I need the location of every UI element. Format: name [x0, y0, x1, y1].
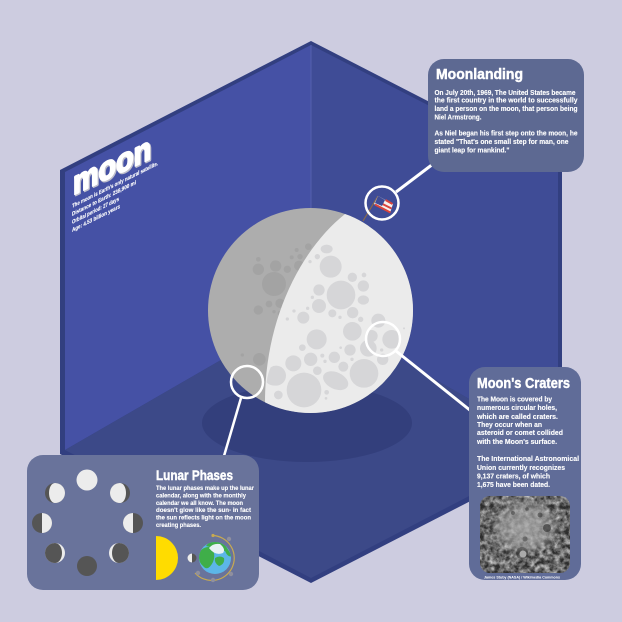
moonlanding text [434, 88, 578, 154]
craters text: The Moon is covered by [477, 394, 552, 404]
moon facts on wall: The moon is Earth's only natural satellite. [72, 160, 158, 210]
lunar phases text: calendar we all know. The moon [156, 500, 243, 507]
isometric room [60, 41, 562, 583]
moonlanding text: the first country in the world to successfully [434, 96, 578, 104]
lunar phases text: creating phases. [156, 522, 201, 529]
moon facts on wall: Distance to Earth: 238,900 mi [72, 179, 136, 218]
crater photo [480, 496, 570, 573]
dark side craters [241, 243, 312, 366]
moon dark side [208, 208, 413, 413]
lunar phases heading: Lunar Phases [156, 467, 233, 483]
full moon [76, 470, 98, 490]
panel: moon's craters [469, 367, 581, 580]
phases callout [224, 366, 263, 456]
craters text [476, 394, 579, 489]
right wall [311, 45, 558, 450]
lunar phases text: doesn't glow like the sun- in fact [156, 507, 252, 514]
craters text: numerous circular holes, [477, 403, 557, 412]
moon title on wall: moon [74, 131, 152, 204]
flag on moon [363, 196, 393, 221]
moon title on wall: moon [73, 130, 151, 203]
waning gibbous [110, 483, 130, 503]
moon [208, 200, 420, 420]
lit side craters [267, 245, 405, 407]
panel: lunar phases [27, 455, 259, 590]
first quarter [32, 513, 52, 533]
moon facts on wall: Age: 4.53 billion years [72, 203, 120, 234]
lunar phases text: calendar, along with the monthly [156, 492, 246, 500]
craters text: 9,137 craters, of which [477, 472, 550, 480]
panel: moonlanding [428, 59, 584, 172]
craters text: 1,675 have been dated. [477, 480, 550, 489]
craters text: asteroid or comet collided [477, 428, 563, 437]
craters text: which are called craters. [476, 412, 558, 421]
craters text: They occur when an [477, 420, 542, 429]
lunar phases text: The lunar phases make up the lunar [156, 485, 254, 492]
moonlanding callout [366, 164, 433, 220]
craters callout [366, 322, 471, 411]
craters text: The International Astronomical [477, 454, 579, 463]
floor [65, 308, 558, 578]
lunar phases text [156, 485, 254, 529]
craters text: Union currently recognizes [477, 463, 565, 472]
waxing crescent [45, 543, 65, 563]
lunar phases text: the sun reflects light on the moon [156, 514, 251, 522]
moonlanding heading: Moonlanding [436, 67, 523, 83]
left wall [65, 45, 311, 450]
lunar phases diagram [32, 470, 143, 576]
moonlanding text: giant leap for mankind." [434, 146, 510, 154]
moon facts on wall [72, 160, 158, 234]
craters heading: Moon's Craters [477, 376, 570, 392]
waning crescent [109, 543, 129, 563]
moon facts on wall: Orbital period: 27 days [72, 196, 119, 226]
moon shadow on floor [202, 384, 412, 462]
moonlanding text: Niel Armstrong. [434, 112, 482, 122]
photo credit: James Stuby (NASA) / Wikimedia Commons [484, 574, 561, 580]
moonlanding text: On July 20th, 1969, The United States became [434, 88, 576, 97]
callout lines and magnifier rings [224, 164, 471, 456]
moonlanding text: land a person on the moon, that person being [434, 104, 578, 113]
moonlanding text: stated "That's one small step for man, one [434, 137, 568, 146]
icon: sun [156, 536, 178, 580]
new moon [77, 556, 97, 576]
waxing gibbous [45, 483, 65, 503]
craters text: with the Moon's surface. [476, 437, 557, 446]
moonlanding text: As Niel began his first step onto the moon, he [434, 128, 578, 138]
icon: earth with orbit [188, 534, 234, 582]
last quarter [123, 513, 143, 533]
moon lit side [265, 214, 413, 413]
